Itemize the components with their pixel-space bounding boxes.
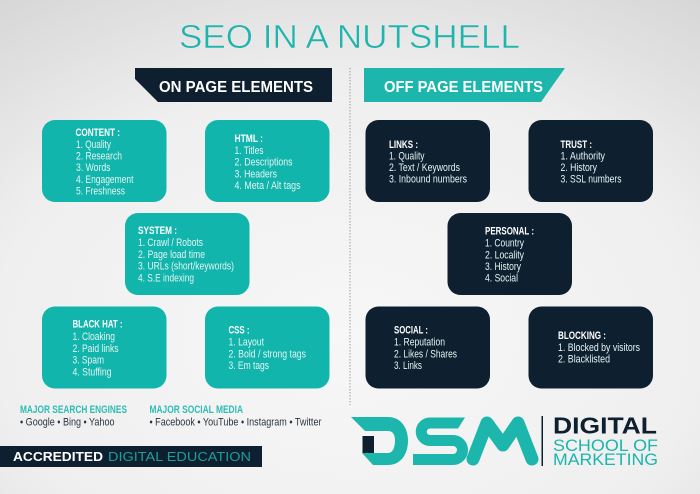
heading: on page elements: ON PAGE ELEMENTS <box>159 79 313 96</box>
logo: DSM Digital School of Marketing: DIGITAL <box>553 412 657 438</box>
panel: content: 4. Engagement <box>76 174 134 186</box>
heading: on page elements <box>135 68 332 102</box>
panel: black hat: 3. Spam <box>72 354 104 366</box>
panel: css <box>205 306 330 388</box>
panel: personal: 4. Social <box>485 272 518 284</box>
text block: major social media <box>150 404 322 428</box>
panel: trust: 1. Authority <box>560 150 605 162</box>
panel: blocking: BLOCKING : <box>558 330 606 342</box>
panel: trust: 2. History <box>560 162 597 174</box>
panel: system: 3. URLs (short/keywords) <box>138 260 234 272</box>
panel: trust <box>528 120 653 202</box>
panel: html <box>205 120 330 202</box>
panel: links: 2. Text / Keywords <box>389 162 460 174</box>
banner: accredited digital education: ACCREDITED <box>13 449 103 464</box>
panel: social: SOCIAL : <box>394 324 428 336</box>
title: SEO IN A NUTSHELL <box>179 18 520 55</box>
panel: links <box>366 120 490 202</box>
panel: system: 4. S.E indexing <box>138 272 194 284</box>
panel: html: 3. Headers <box>234 168 277 180</box>
panel: css: 1. Layout <box>228 336 265 348</box>
logo: DSM Digital School of Marketing: SCHOOL OF <box>553 437 658 455</box>
text block: major search engines <box>20 404 127 428</box>
panel: html: 4. Meta / Alt tags <box>234 180 301 192</box>
logo: DSM Digital School of Marketing <box>351 412 658 469</box>
panel: social <box>366 306 490 388</box>
panel: black hat: 4. Stuffing <box>72 366 112 378</box>
panel: system <box>125 213 250 295</box>
panel: content: 5. Freshness <box>76 186 125 198</box>
panel: system: SYSTEM : <box>138 225 177 237</box>
text block: major social media: MAJOR SOCIAL MEDIA <box>150 404 243 416</box>
panel: personal: 3. History <box>485 261 521 273</box>
text block: major social media: • Facebook • YouTube • Instagram • Twitter <box>150 416 322 428</box>
panel: html: HTML : <box>234 133 263 145</box>
panel: system: 1. Crawl / Robots <box>138 237 203 249</box>
panel: css: 3. Em tags <box>228 360 269 372</box>
heading: off page elements <box>364 68 565 102</box>
banner: accredited digital education: DIGITAL EDUCATION <box>108 449 251 464</box>
icon: DSM letter D <box>351 417 408 465</box>
panel: black hat <box>42 306 166 388</box>
panel: content: 2. Research <box>76 150 122 162</box>
heading: off page elements: OFF PAGE ELEMENTS <box>384 79 543 96</box>
panel: content <box>42 120 166 202</box>
panel: social: 3. Links <box>394 360 422 372</box>
panel: personal <box>448 213 572 295</box>
panel: css: CSS : <box>228 324 250 336</box>
text block: major search engines: MAJOR SEARCH ENGINES <box>20 404 127 416</box>
panel: personal: 2. Locality <box>485 250 524 262</box>
panel: black hat: BLACK HAT : <box>72 318 122 330</box>
panel: black hat: 2. Paid links <box>72 343 119 355</box>
panel: black hat: 1. Cloaking <box>72 331 115 343</box>
panel: content: CONTENT : <box>76 127 120 139</box>
banner: accredited digital education <box>0 446 262 467</box>
panel: blocking: 2. Blacklisted <box>558 354 610 366</box>
panel: blocking: 1. Blocked by visitors <box>558 342 640 354</box>
panel: trust: TRUST : <box>560 139 592 151</box>
panel: blocking <box>528 306 653 388</box>
panel: social: 2. Likes / Shares <box>394 348 457 360</box>
panel: trust: 3. SSL numbers <box>560 174 622 186</box>
panel: links: 3. Inbound numbers <box>389 174 467 186</box>
panel: css: 2. Bold / strong tags <box>228 348 306 360</box>
panel: content: 1. Quality <box>76 139 111 151</box>
panel: personal: 1. Country <box>485 238 524 250</box>
logo: DSM Digital School of Marketing: MARKETING <box>553 451 658 469</box>
panel: html: 1. Titles <box>234 145 264 157</box>
panel: personal: PERSONAL : <box>485 226 534 238</box>
panel: content: 3. Words <box>76 162 111 174</box>
text block: major search engines: • Google • Bing • Yahoo <box>20 416 114 428</box>
panel: links: 1. Quality <box>389 150 425 162</box>
panel: system: 2. Page load time <box>138 249 205 261</box>
panel: links: LINKS : <box>389 139 418 151</box>
panel: html: 2. Descriptions <box>234 156 293 168</box>
panel: social: 1. Reputation <box>394 336 445 348</box>
